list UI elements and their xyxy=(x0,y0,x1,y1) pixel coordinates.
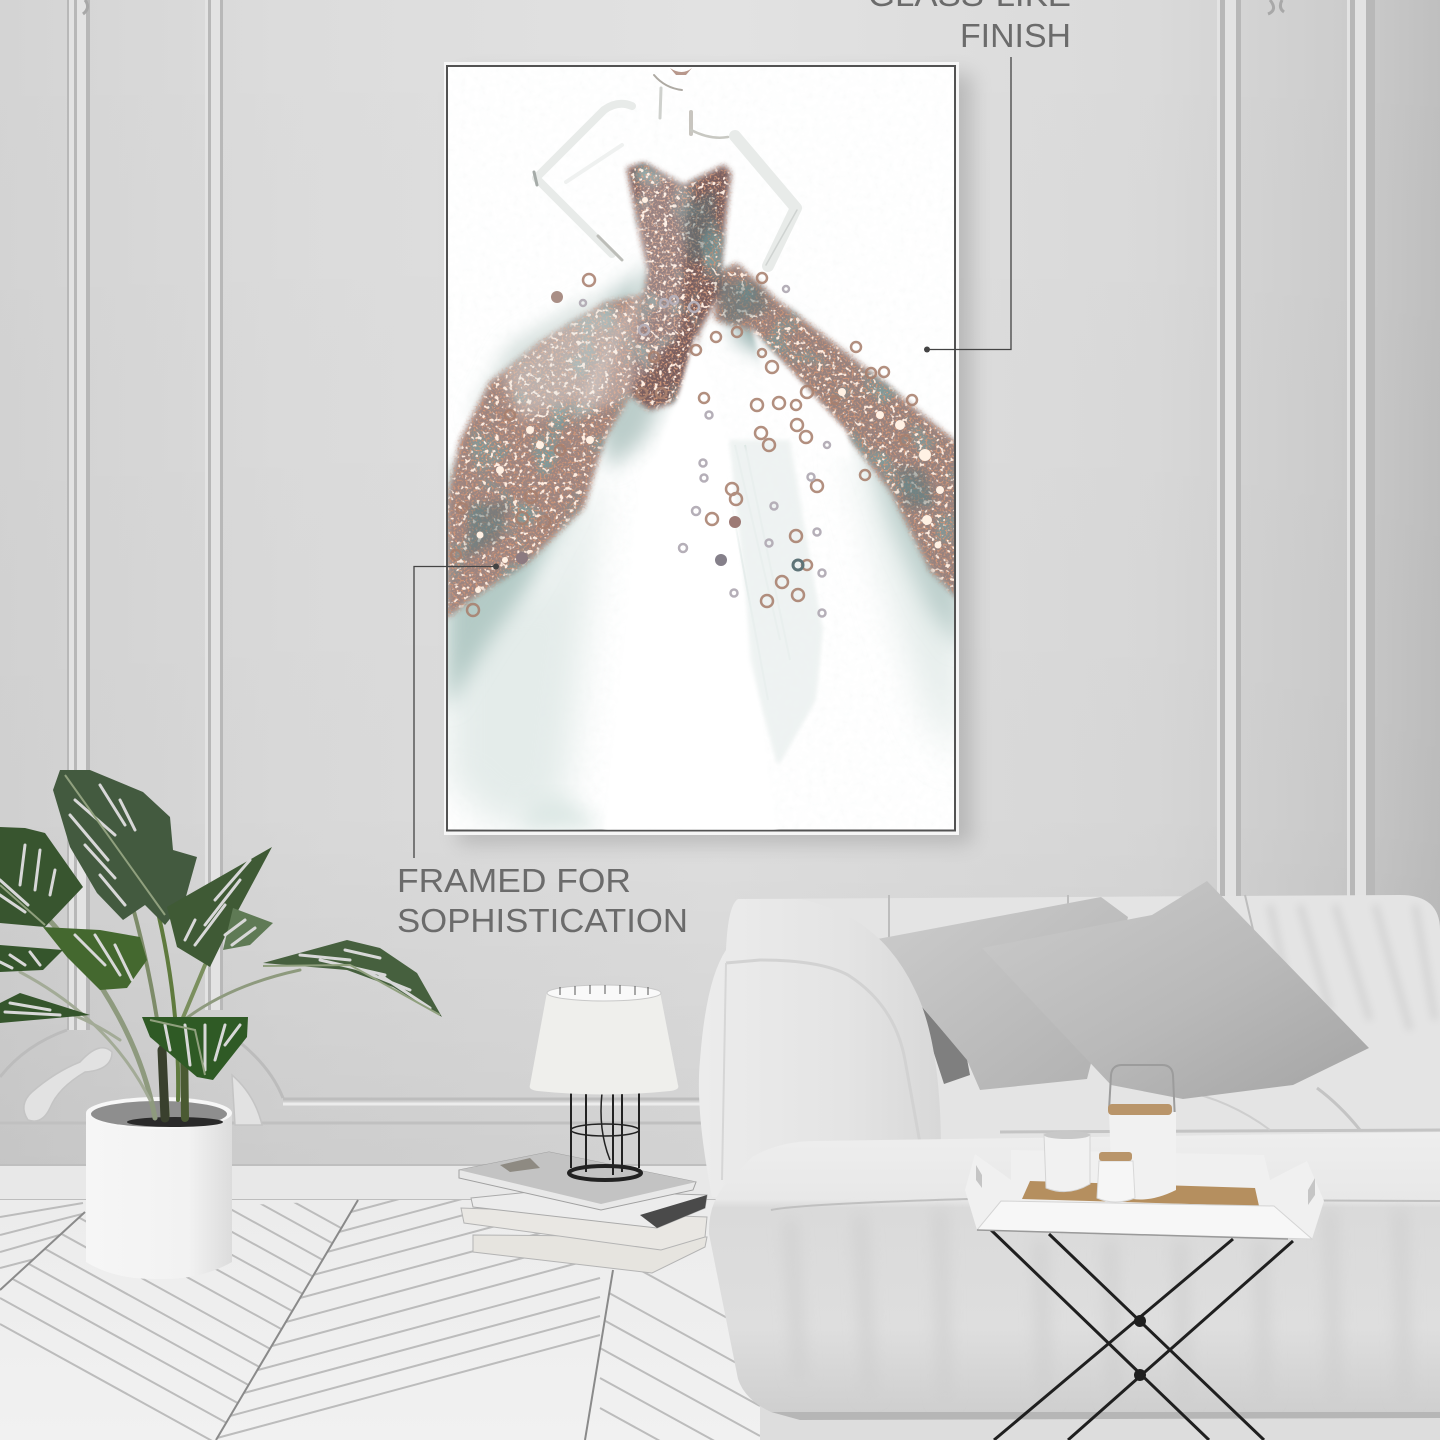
slate shading on skirt xyxy=(465,190,935,560)
teal wash of skirt xyxy=(447,260,960,710)
center wash strokes xyxy=(734,440,811,700)
front sofa cushion xyxy=(709,1132,1440,1412)
figure head mark xyxy=(670,68,692,75)
left sofa arm xyxy=(699,899,941,1200)
sofa xyxy=(699,881,1440,1420)
bright glints xyxy=(475,197,944,593)
lamp shade xyxy=(530,992,678,1094)
grey pillow right xyxy=(982,881,1369,1099)
stems xyxy=(20,890,300,1118)
leader endpoint xyxy=(493,564,499,570)
filled sequins xyxy=(516,291,803,570)
pale skirt wash xyxy=(447,440,960,830)
callout text: FINISH xyxy=(960,17,1071,54)
leg pivots xyxy=(1134,1315,1146,1381)
dress painting xyxy=(447,67,960,830)
plant pot xyxy=(86,1097,232,1279)
floor xyxy=(0,1200,760,1440)
white skirt openings xyxy=(604,327,850,830)
table lamp xyxy=(530,985,678,1180)
side table xyxy=(965,1065,1324,1440)
leader dot xyxy=(924,346,930,352)
books stack xyxy=(459,1152,707,1273)
bottom wash xyxy=(520,795,600,830)
sofa floor shadow xyxy=(771,1412,1440,1420)
callout label line two: SOPHISTICATION xyxy=(397,902,688,939)
leader line xyxy=(928,57,1011,350)
inner frame line xyxy=(447,66,955,830)
framed artwork xyxy=(444,62,960,835)
leader path xyxy=(414,566,496,858)
back cushion pleats xyxy=(1270,905,1435,1030)
seat cushions xyxy=(940,1063,1440,1150)
monstera leaves xyxy=(0,770,442,1080)
table legs xyxy=(989,1228,1293,1440)
left rose glitter sleeve xyxy=(448,292,646,620)
small canister xyxy=(1097,1161,1135,1202)
baseboard xyxy=(0,1164,730,1201)
callout: framed for sophistication xyxy=(397,564,688,939)
figure arms xyxy=(534,75,797,266)
lamp cage xyxy=(569,1093,641,1180)
tray xyxy=(965,1150,1324,1239)
leaf slits xyxy=(0,785,430,1070)
white frame xyxy=(444,62,959,835)
tall canister xyxy=(1109,1112,1176,1200)
cup xyxy=(1044,1134,1090,1192)
sofa back xyxy=(730,895,1440,1180)
callout: glass-like finish xyxy=(868,0,1071,352)
right rose glitter sleeve xyxy=(714,263,960,600)
paper texture xyxy=(448,67,954,830)
callout label: FRAMED FOR xyxy=(397,862,631,899)
plant xyxy=(0,770,442,1118)
gap shadow xyxy=(917,1001,970,1084)
front cushion pleats xyxy=(790,1210,1405,1400)
center wash strokes over opening xyxy=(734,445,791,700)
upper left haze xyxy=(500,300,625,420)
glass reflection haze xyxy=(570,170,690,420)
leaf ribs xyxy=(0,775,440,1075)
frame shadow xyxy=(458,74,972,844)
grey pillow left xyxy=(867,897,1128,1090)
rose sequins xyxy=(451,273,917,616)
pale sequins xyxy=(580,286,830,616)
canister handle xyxy=(1109,1065,1175,1121)
bodice xyxy=(627,163,731,410)
wall moldings xyxy=(0,0,1375,1125)
